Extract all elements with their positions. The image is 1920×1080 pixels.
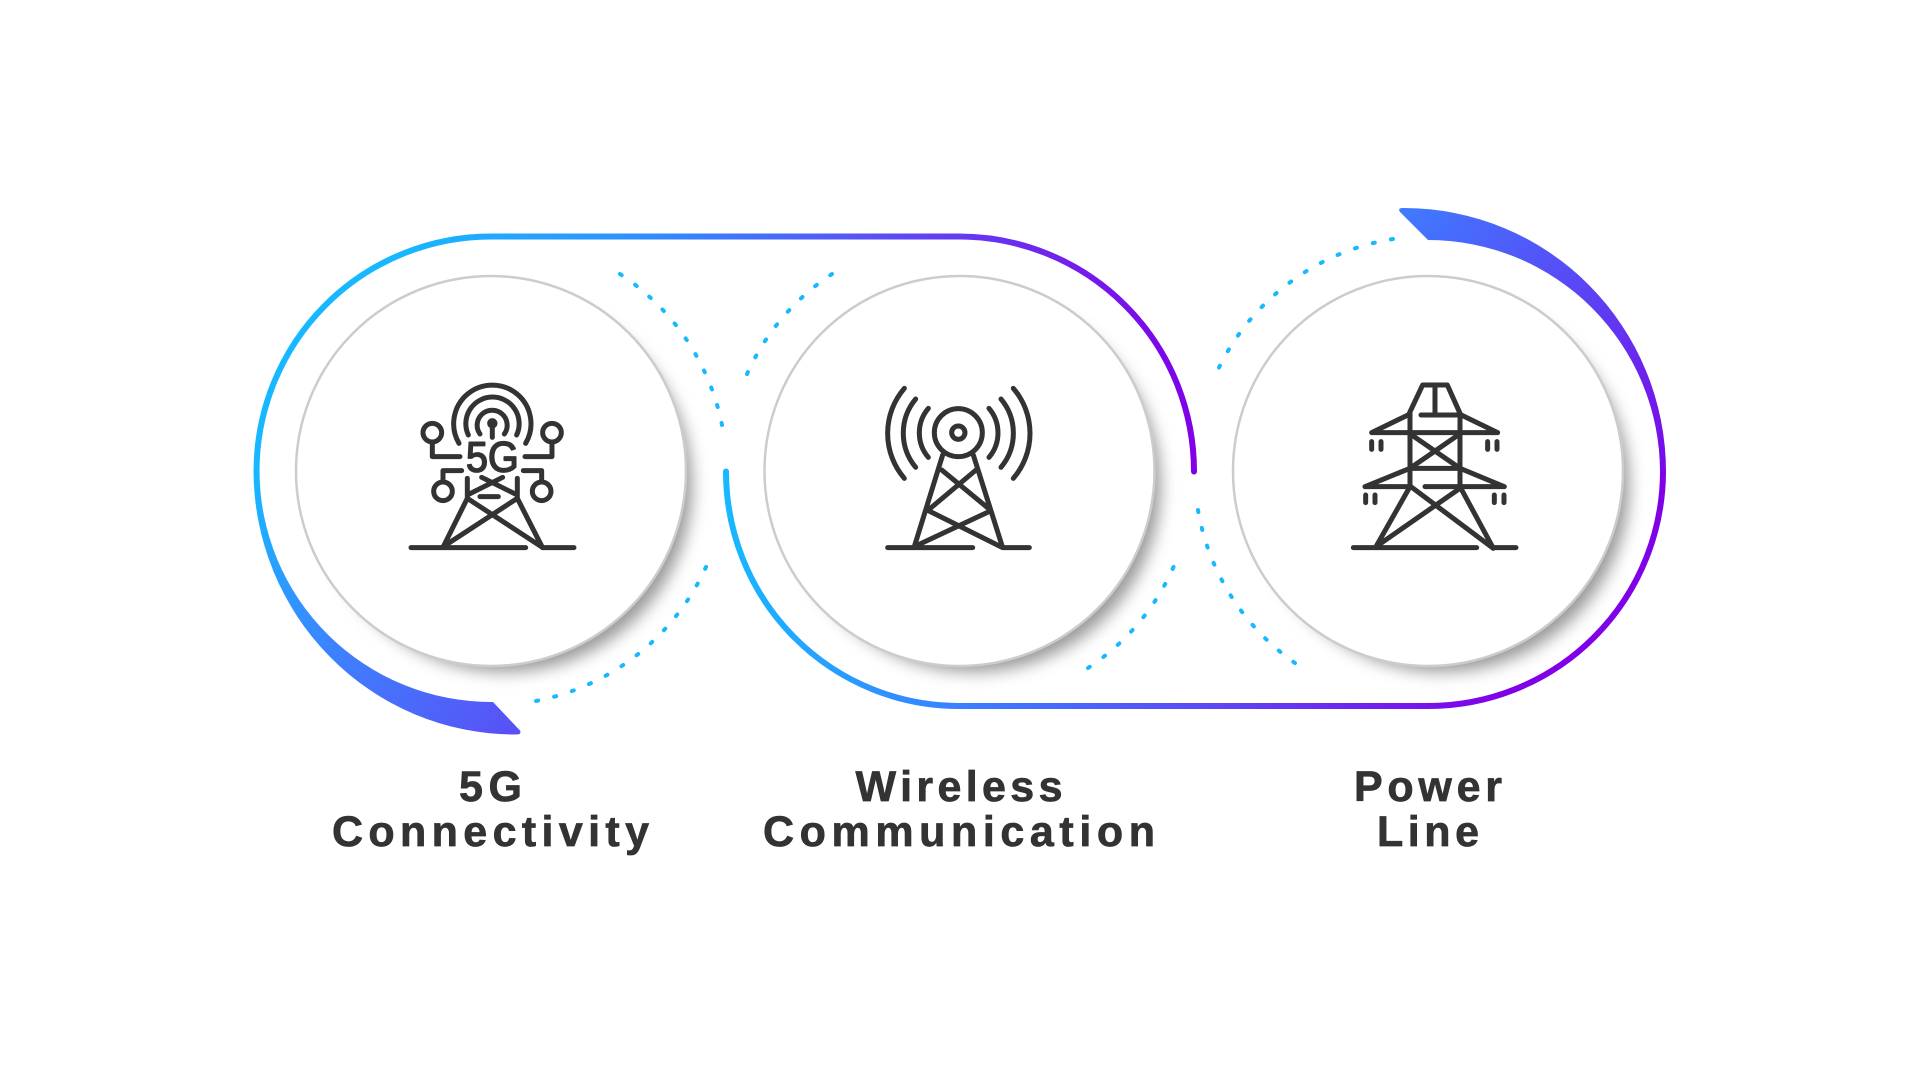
circle: power line: [1233, 276, 1623, 666]
circle: 5G: [296, 276, 686, 666]
circle: wireless: [764, 276, 1154, 666]
label: Power Line: Line: [1377, 808, 1479, 856]
label: Wireless Communication: [763, 763, 1155, 856]
label: Power Line: [1354, 763, 1502, 856]
label: 5G Connectivity: Connectivity: [332, 808, 649, 856]
label: 5G Connectivity: [332, 763, 649, 856]
circle shadows: [318, 298, 1629, 672]
connector ring: top left to centre right: [256, 236, 1194, 472]
ring end cap: [1191, 468, 1197, 474]
label: Wireless Communication: Wireless: [856, 763, 1062, 811]
label: Power Line: Power: [1354, 763, 1502, 811]
crescent arrow: bottom left: [254, 470, 520, 735]
label: Wireless Communication: Communication: [763, 808, 1155, 856]
icon: radio mast: [888, 388, 1030, 548]
icon: 5G tower: [411, 385, 574, 548]
dotted arcs: [536, 239, 1393, 701]
icon: power pylon: [1353, 385, 1516, 548]
crescent arrow: top right: [1399, 208, 1666, 472]
label: 5G Connectivity: 5G: [459, 763, 522, 811]
connector ring: bottom centre to right: [726, 472, 1663, 706]
icon: 5G tower: 5G: [466, 434, 519, 482]
